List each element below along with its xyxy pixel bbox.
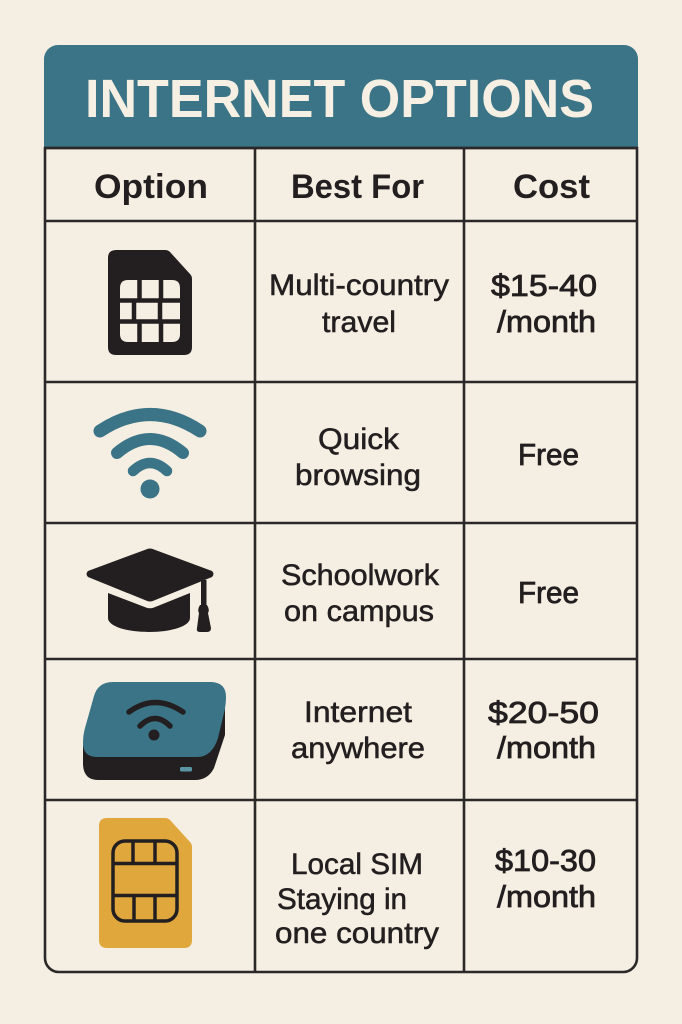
row 4 cost: /month: [497, 730, 596, 765]
row 4 best for: anywhere: [291, 732, 425, 765]
row 1 best for: Multi-country: [269, 269, 449, 302]
table header row: [94, 168, 590, 206]
table header row: Option: [94, 168, 208, 206]
row 4 best for: [291, 696, 425, 765]
row 2 best for: browsing: [295, 459, 421, 492]
row 5 best for: [275, 848, 439, 950]
row 5 cost: /month: [497, 879, 596, 914]
row 1 best for: travel: [322, 306, 396, 339]
table grid: [45, 148, 637, 972]
row 3 best for: Schoolwork: [281, 559, 440, 592]
row 3 cost: Free: [518, 575, 579, 610]
row 2 best for: Quick: [318, 423, 400, 456]
icon: local SIM card: [99, 818, 192, 948]
row 1 cost: [491, 268, 597, 339]
row 3 best for: on campus: [284, 595, 434, 628]
row 1 best for: [269, 269, 449, 339]
table header row: Best For: [291, 168, 424, 206]
title: INTERNET OPTIONS: [85, 69, 594, 129]
row 5 best for: one country: [275, 917, 439, 950]
row 3 best for: [281, 559, 440, 628]
row 2 best for: [295, 423, 421, 492]
row 5 cost: [495, 843, 596, 914]
row 5 best for: Local SIM: [291, 848, 423, 881]
icon: eSIM card: [108, 250, 192, 355]
row 1 cost: /month: [497, 304, 596, 339]
row 4 best for: Internet: [304, 696, 413, 729]
icon: wifi: [100, 414, 200, 498]
row 5 best for: Staying in: [277, 883, 407, 916]
row 4 cost: $20-50: [488, 695, 599, 730]
row 5 cost: $10-30: [495, 843, 596, 878]
row 1 cost: $15-40: [491, 268, 597, 303]
title banner: [44, 45, 638, 148]
icon: portable hotspot: [83, 682, 226, 780]
table header row: Cost: [513, 168, 590, 206]
icon: graduation cap: [86, 548, 214, 632]
row 4 cost: [488, 695, 599, 765]
row 2 cost: Free: [518, 437, 579, 472]
